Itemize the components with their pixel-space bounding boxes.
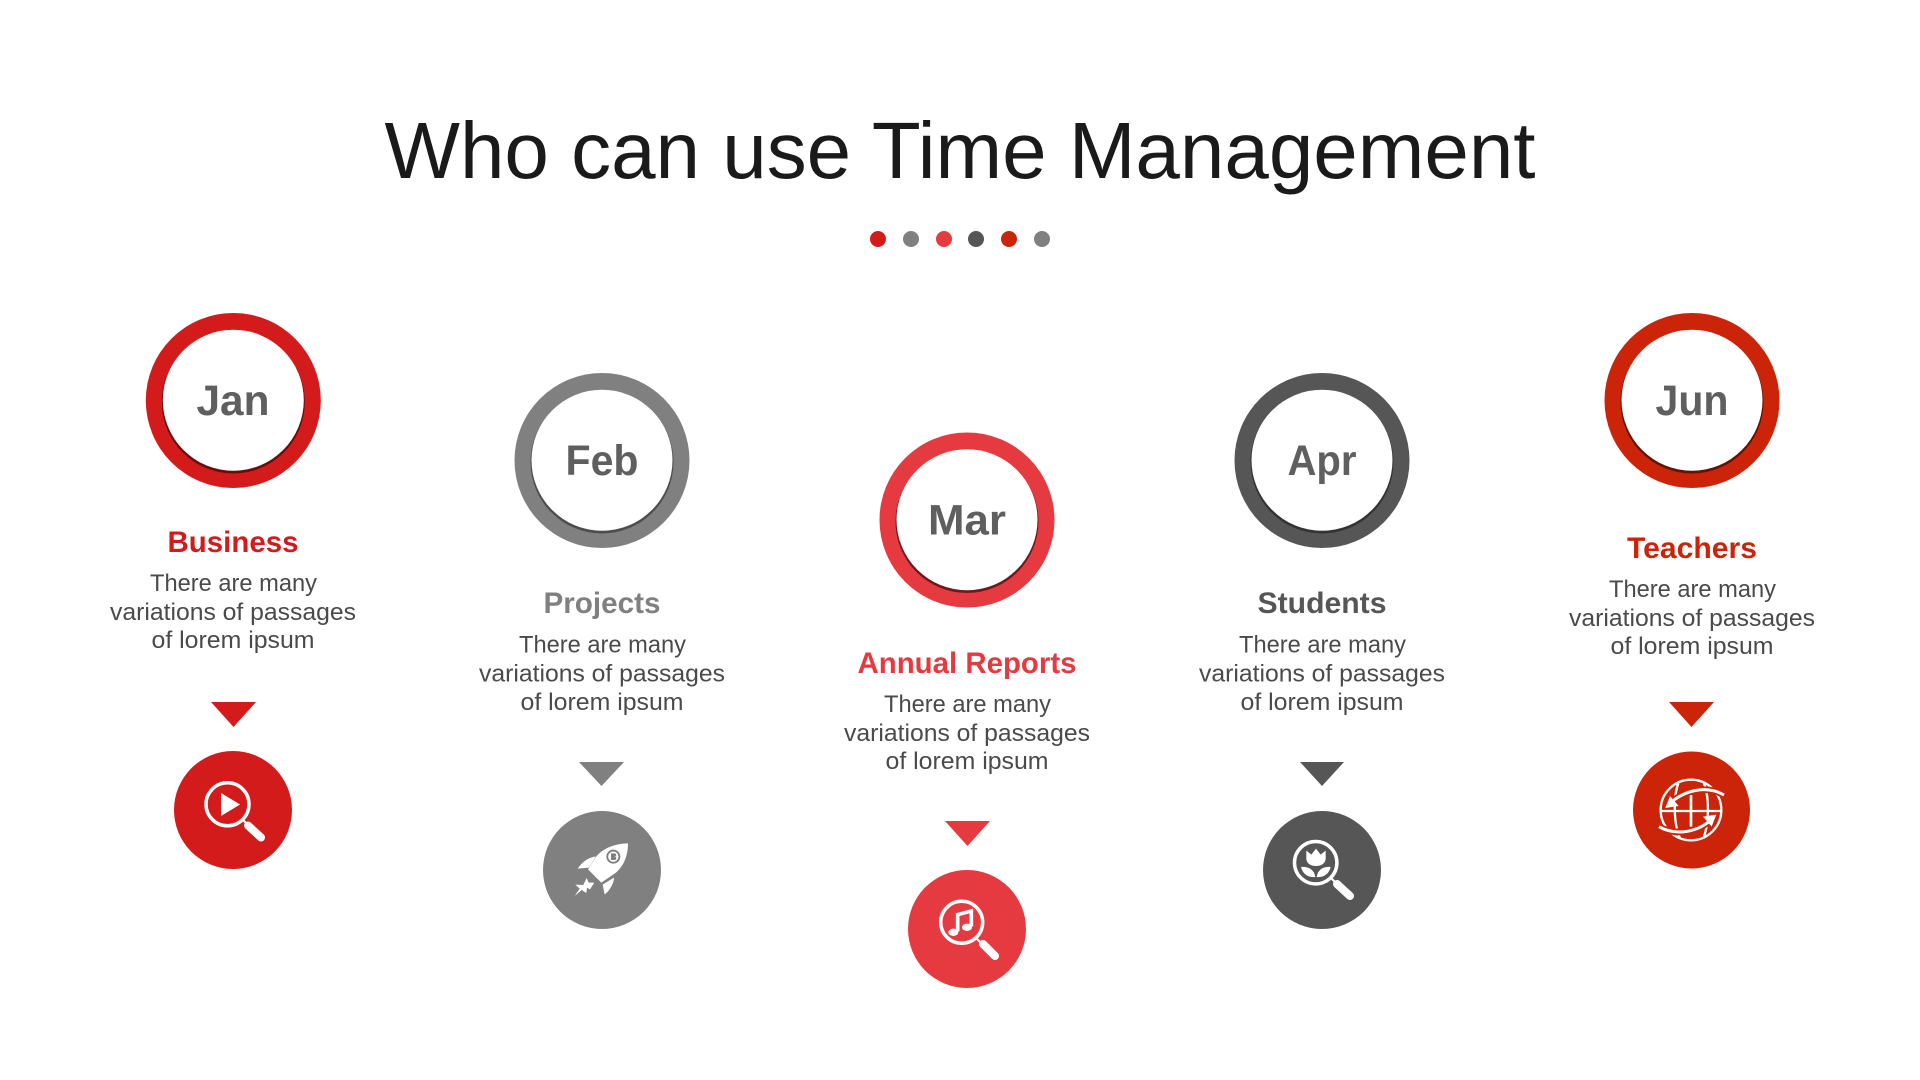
icon: tulip magnifier bbox=[1263, 811, 1381, 929]
month ring: Jun bbox=[1604, 313, 1780, 488]
arrow: Jun bbox=[1669, 702, 1714, 727]
month ring: Feb: Feb bbox=[566, 437, 638, 485]
description: Students: variations of passages bbox=[1199, 660, 1445, 688]
description: Annual Reports: of lorem ipsum bbox=[886, 748, 1048, 775]
column: Feb / Projects bbox=[479, 373, 725, 929]
description: Projects: variations of passages bbox=[479, 660, 725, 688]
description: Business: of lorem ipsum bbox=[152, 627, 314, 654]
description: Teachers: of lorem ipsum bbox=[1610, 633, 1774, 660]
description: Students bbox=[1199, 632, 1445, 716]
icon: globe with arrows bbox=[1633, 752, 1750, 868]
heading: Teachers: Teachers bbox=[1627, 532, 1757, 565]
description: Teachers bbox=[1569, 576, 1815, 660]
description: Teachers: There are many bbox=[1609, 576, 1776, 603]
arrow: Apr bbox=[1300, 762, 1344, 786]
month ring: Jun: Jun bbox=[1656, 377, 1728, 425]
month ring: Jan: Jan bbox=[196, 377, 270, 425]
description: Business: There are many bbox=[150, 570, 317, 597]
description: Annual Reports: There are many bbox=[884, 691, 1051, 718]
heading: Students: Students bbox=[1258, 587, 1386, 620]
month ring: Jan bbox=[146, 313, 321, 488]
title: Who can use Time Management bbox=[384, 106, 1536, 195]
description: Business: variations of passages bbox=[110, 599, 356, 626]
column: Jun / Teachers bbox=[1569, 313, 1815, 868]
description: Teachers: variations of passages bbox=[1569, 605, 1815, 632]
icon: play magnifier bbox=[174, 751, 292, 869]
column: Jan / Business bbox=[110, 313, 356, 869]
icon: music magnifier bbox=[908, 870, 1026, 988]
arrow: Feb bbox=[579, 762, 624, 786]
month ring: Mar bbox=[880, 432, 1054, 608]
arrow: Mar bbox=[945, 821, 990, 846]
description: Students: of lorem ipsum bbox=[1240, 689, 1404, 716]
month ring: Feb bbox=[514, 373, 690, 548]
description: Projects bbox=[479, 632, 725, 716]
description: Annual Reports bbox=[844, 691, 1090, 775]
description: Business bbox=[110, 570, 356, 654]
column: Apr / Students bbox=[1199, 373, 1445, 929]
month ring: Apr bbox=[1234, 373, 1410, 548]
description: Students: There are many bbox=[1239, 632, 1406, 658]
description: Projects: There are many bbox=[519, 632, 686, 658]
heading: Business: Business bbox=[168, 526, 298, 559]
column: Mar / Annual Reports bbox=[844, 432, 1090, 988]
icon: rocket bbox=[543, 811, 661, 929]
decorative dot row bbox=[870, 231, 1050, 247]
arrow: Jan bbox=[211, 702, 256, 727]
month ring: Apr: Apr bbox=[1288, 437, 1357, 485]
description: Annual Reports: variations of passages bbox=[844, 720, 1090, 747]
description: Projects: of lorem ipsum bbox=[520, 689, 684, 716]
heading: Annual Reports: Annual Reports bbox=[858, 647, 1076, 680]
month ring: Mar: Mar bbox=[928, 496, 1006, 544]
heading: Projects: Projects bbox=[544, 587, 660, 620]
